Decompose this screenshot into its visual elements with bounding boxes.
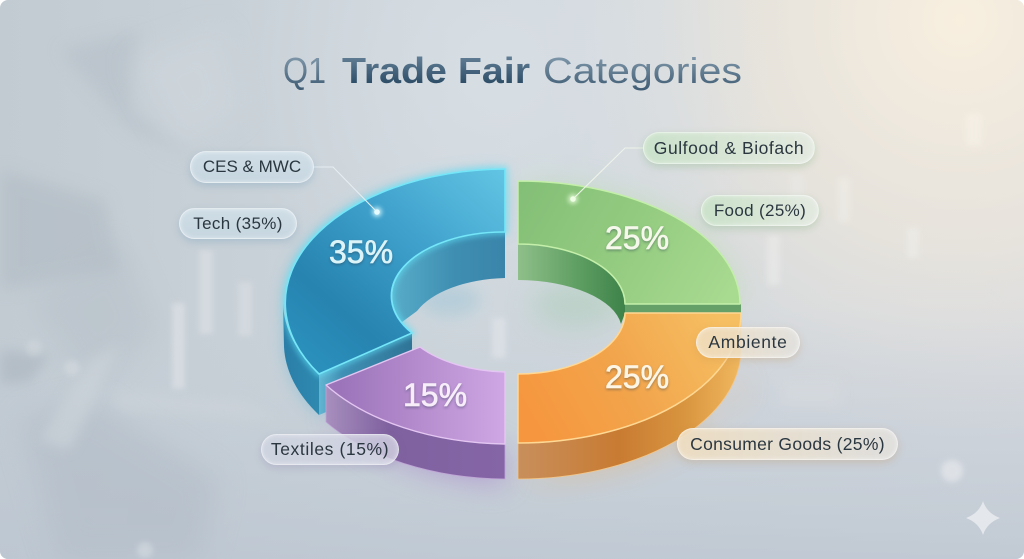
label: Food (25%) [701, 195, 819, 226]
value: 25% food: 25% [605, 220, 669, 256]
label: Textiles (15%) [261, 434, 399, 465]
blue cut face [319, 333, 412, 415]
purple wall [326, 385, 505, 479]
icon: sparkle [966, 501, 1000, 535]
label: CES & MWC: CES & MWC [203, 157, 301, 176]
label: Gulfood & Biofach: Gulfood & Biofach [654, 138, 804, 158]
chart shadow glow [283, 169, 745, 485]
blue inner wall [392, 232, 505, 322]
slice: food 25% [518, 181, 741, 324]
title: Categories [543, 50, 742, 91]
leader: CES and MWC [313, 167, 382, 217]
title: Trade Fair [342, 50, 530, 91]
value: 35%: 35% [329, 234, 393, 270]
slice: consumer goods 25% [518, 313, 741, 479]
green cut strip [625, 304, 741, 313]
label: Ambiente: Ambiente [708, 332, 788, 352]
label: Ambiente [696, 327, 800, 358]
slice: tech 35% [283, 169, 505, 415]
orange wall [518, 313, 741, 479]
blue outer wall [283, 303, 319, 415]
blue top glow [285, 169, 505, 374]
leader: Gulfood and Biofach [568, 148, 643, 204]
label: Textiles (15%): Textiles (15%) [271, 439, 389, 459]
value: 25% consumer goods: 25% [605, 359, 669, 395]
label: Gulfood & Biofach [643, 132, 815, 164]
title [283, 50, 742, 91]
blue top face [285, 169, 505, 374]
green top face [518, 181, 740, 304]
label: Tech (35%): Tech (35%) [193, 214, 283, 232]
label: Consumer Goods (25%): Consumer Goods (25%) [690, 434, 885, 454]
label: Tech (35%) [179, 208, 297, 239]
purple top face [326, 347, 505, 444]
label: Food (25%): Food (25%) [714, 200, 806, 220]
slice: textiles 15% [326, 347, 505, 479]
label: CES & MWC [190, 151, 314, 183]
green inner wall [518, 244, 625, 324]
orange top face [518, 313, 741, 443]
title: Q1 [283, 50, 326, 91]
value: 15%: 15% [403, 377, 467, 413]
label: Consumer Goods (25%) [677, 428, 898, 460]
